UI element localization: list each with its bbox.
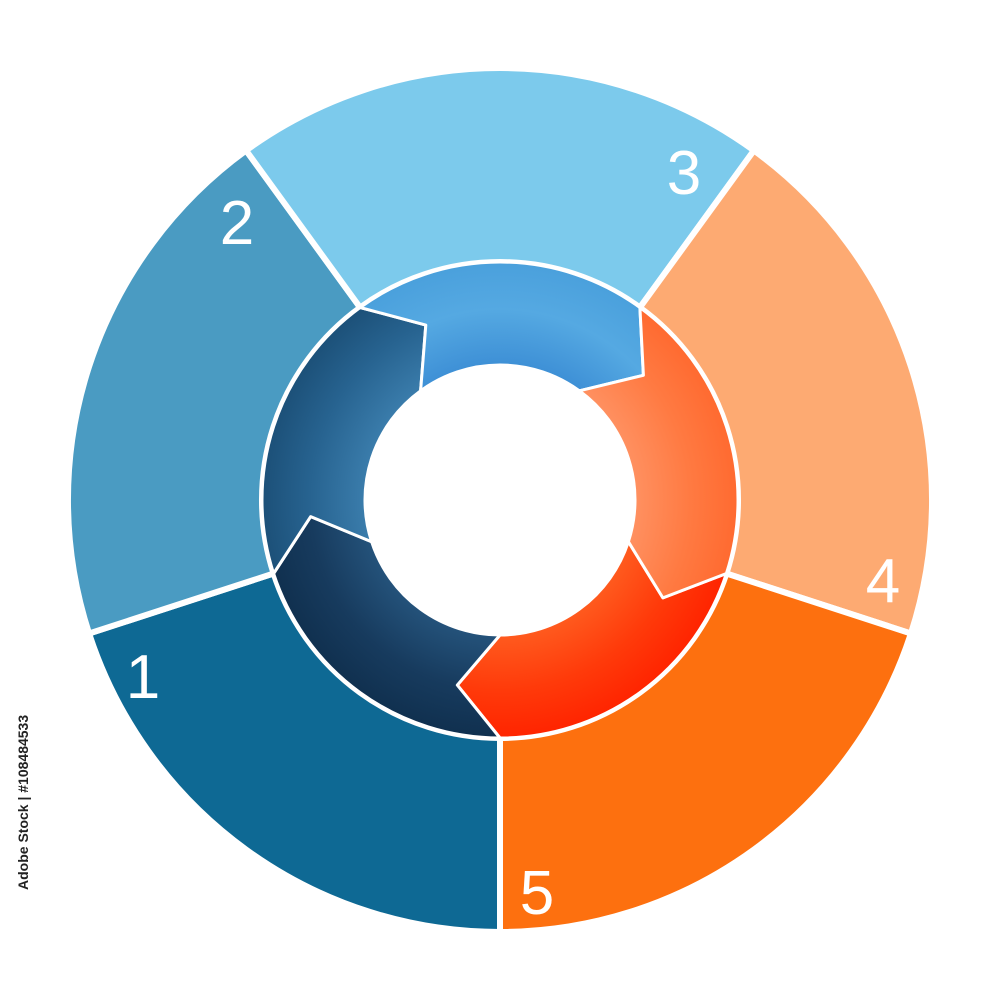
number 5: 5 [520, 859, 554, 928]
outer segment 4 [640, 150, 932, 634]
outer segment 2 [68, 150, 360, 634]
arrow: light blue [360, 262, 643, 391]
credit text: Adobe Stock | #108484533 [15, 715, 31, 890]
arrow: dark blue [262, 308, 426, 574]
arrow: navy [274, 517, 500, 738]
arrow: orange [579, 308, 738, 598]
outer segment 3 [246, 68, 754, 308]
number 3: 3 [667, 139, 701, 208]
arrow: red [457, 542, 726, 738]
number 4: 4 [866, 547, 900, 616]
number 1: 1 [126, 643, 160, 712]
outer segment 1 [89, 574, 500, 932]
outer segment 5 [500, 574, 911, 932]
number 2: 2 [220, 189, 254, 258]
